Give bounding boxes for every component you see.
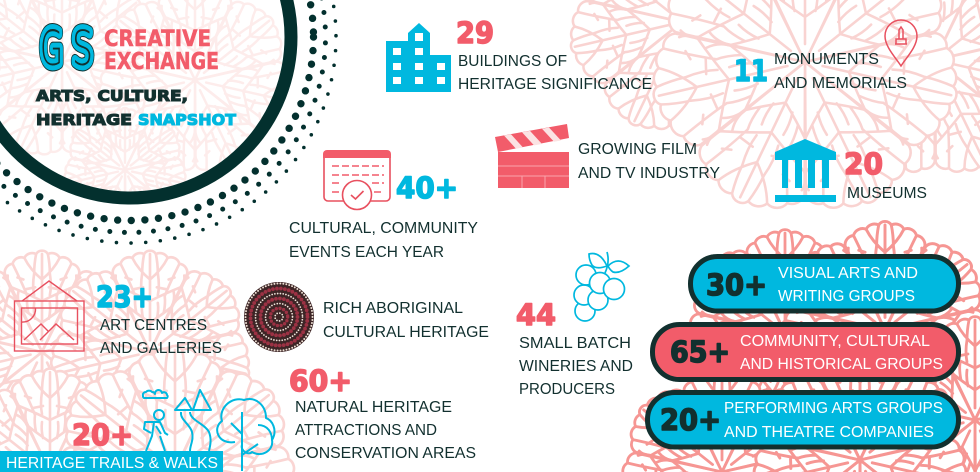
pill: visual arts: 30+	[706, 268, 767, 302]
logo	[40, 21, 219, 77]
stat: events: CULTURAL, COMMUNITY	[289, 220, 478, 237]
stat: wineries: PRODUCERS	[519, 381, 615, 398]
stat: natural heritage: NATURAL HERITAGE	[295, 399, 452, 416]
stat: monuments: AND MEMORIALS	[774, 75, 907, 92]
stat: buildings: HERITAGE SIGNIFICANCE	[458, 76, 652, 93]
stat: wineries: SMALL BATCH	[519, 335, 631, 352]
pill: performing arts: PERFORMING ARTS GROUPS	[724, 400, 943, 417]
icon: clapperboard	[495, 124, 569, 188]
stat: monuments	[734, 20, 917, 92]
pill: community groups: 65+	[670, 335, 730, 369]
stat: trails	[0, 390, 274, 472]
stat: monuments: MONUMENTS	[774, 51, 879, 68]
stat: trails: 20+	[72, 418, 133, 452]
pill: community groups	[652, 324, 958, 380]
icon: map pin monument	[885, 20, 917, 66]
icon: aboriginal dot painting	[244, 282, 314, 352]
stat: natural heritage	[289, 364, 476, 462]
stat: museums: MUSEUMS	[847, 185, 927, 202]
stat: aboriginal heritage: CULTURAL HERITAGE	[323, 324, 489, 341]
stat: natural heritage: ATTRACTIONS AND	[295, 422, 437, 439]
pill: community groups: AND HISTORICAL GROUPS	[740, 356, 943, 373]
logo: G	[40, 21, 63, 77]
logo: S	[72, 21, 93, 77]
stat: art centres: AND GALLERIES	[100, 340, 222, 357]
stat: buildings	[386, 16, 652, 93]
stat: film: GROWING FILM	[578, 141, 697, 158]
stat: museums: 20	[844, 147, 883, 181]
stat: monuments: 11	[734, 54, 768, 88]
logo: G	[40, 21, 63, 77]
stat: buildings: 29	[456, 16, 494, 50]
logo: G	[40, 21, 63, 77]
pill: community groups: COMMUNITY, CULTURAL	[740, 333, 930, 350]
pill: performing arts: 20+	[660, 403, 721, 437]
stat: wineries: 44	[516, 298, 556, 332]
pill: visual arts	[690, 256, 958, 311]
pill: performing arts: AND THEATRE COMPANIES	[724, 424, 934, 441]
title	[36, 87, 236, 129]
stat: aboriginal heritage: RICH ABORIGINAL	[323, 300, 463, 317]
pill: performing arts	[648, 392, 958, 447]
stat: natural heritage: CONSERVATION AREAS	[295, 445, 476, 462]
logo: EXCHANGE	[104, 49, 219, 75]
title: HERITAGE	[36, 111, 132, 129]
icon: museum	[775, 139, 836, 202]
pill: visual arts: VISUAL ARTS AND	[778, 265, 918, 282]
stat: events: 40+	[396, 171, 458, 205]
stat: film: AND TV INDUSTRY	[578, 165, 720, 182]
stat: wineries	[516, 252, 633, 398]
label bar	[0, 451, 223, 472]
icon: framed picture	[14, 281, 84, 351]
stat: film	[495, 124, 720, 188]
stat: aboriginal heritage	[244, 282, 489, 352]
pill: visual arts: WRITING GROUPS	[778, 288, 915, 305]
stat: buildings: BUILDINGS OF	[458, 53, 567, 70]
title panel circle	[0, 0, 336, 243]
icon: trail scene with hiker, mountains and tree	[143, 390, 274, 471]
stat: trails: HERITAGE TRAILS & WALKS	[6, 455, 218, 472]
stat: events: EVENTS EACH YEAR	[289, 244, 444, 261]
stat: museums	[775, 139, 927, 202]
logo: S	[72, 21, 93, 77]
stat: art centres: 23+	[96, 280, 153, 314]
icon: calendar	[323, 150, 391, 210]
stat: events	[289, 150, 478, 261]
stat: art centres	[14, 280, 222, 357]
stat: natural heritage: 60+	[289, 364, 352, 398]
stat: wineries: WINERIES AND	[519, 358, 633, 375]
logo: CREATIVE	[104, 27, 211, 52]
title: ARTS, CULTURE,	[36, 87, 188, 105]
logo: S	[72, 21, 93, 77]
icon: grapes	[574, 252, 629, 321]
stat: art centres: ART CENTRES	[100, 317, 207, 334]
title: SNAPSHOT	[138, 111, 236, 129]
icon: building	[386, 23, 451, 92]
